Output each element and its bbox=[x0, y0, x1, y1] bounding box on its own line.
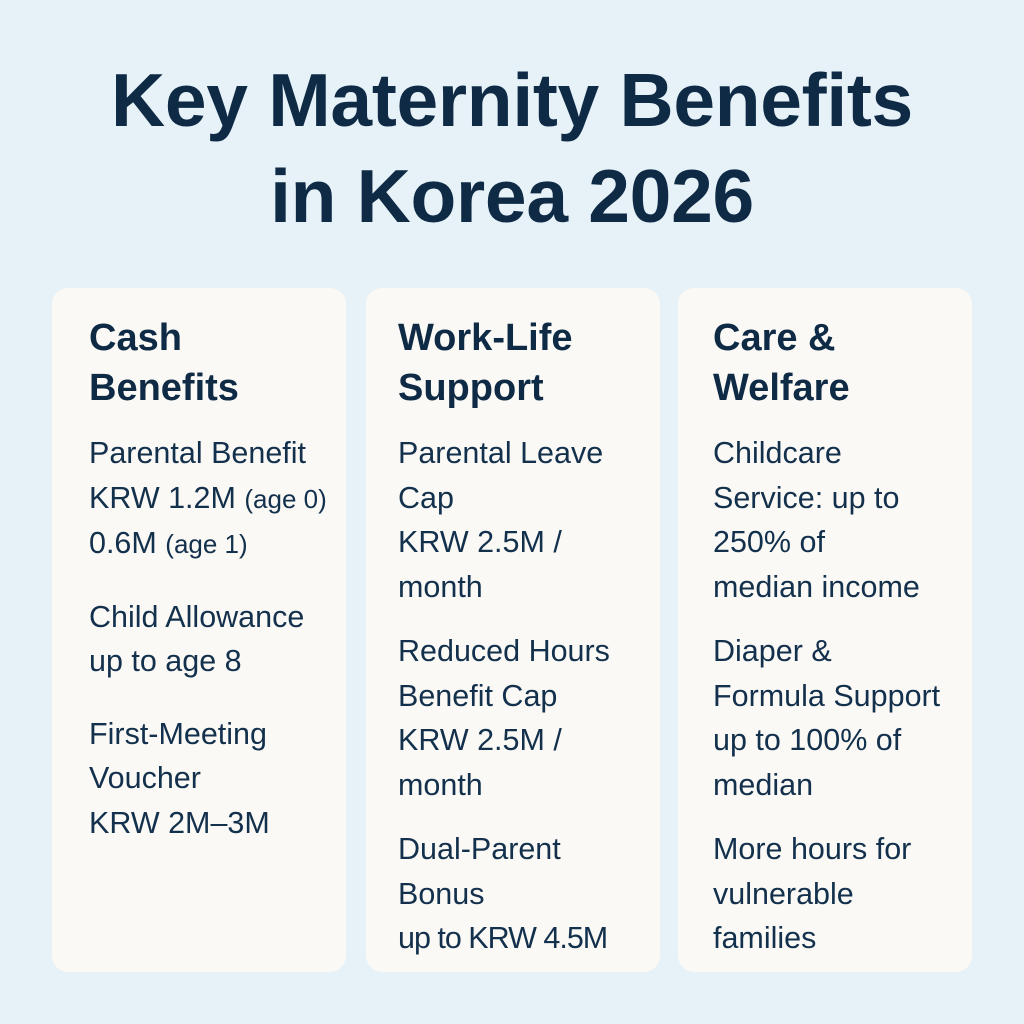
text: work-life items: month bbox=[398, 768, 483, 802]
heading: care & welfare bbox=[713, 317, 850, 409]
text: care items: More hours for bbox=[713, 832, 911, 866]
text: work-life items: Dual-Parent bbox=[398, 832, 561, 866]
text: care items: families bbox=[713, 921, 816, 955]
text: care items: Service: up to bbox=[713, 480, 900, 514]
text: care items: Formula Support bbox=[713, 678, 940, 712]
text: care items: Childcare bbox=[713, 436, 842, 470]
heading: work-life support: Work-Life bbox=[398, 317, 573, 359]
text: care items: vulnerable bbox=[713, 876, 854, 910]
text: cash benefits items: 0.6M (age 1) bbox=[89, 526, 248, 560]
text: work-life items: Benefit Cap bbox=[398, 678, 557, 712]
text: care items: median bbox=[713, 768, 813, 802]
title: in Korea 2026 bbox=[270, 154, 754, 238]
text: work-life items: KRW 2.5M / bbox=[398, 525, 562, 559]
text: cash benefits items: Child Allowance bbox=[89, 600, 304, 634]
text: work-life items: Cap bbox=[398, 480, 454, 514]
text: cash benefits items: KRW 1.2M (age 0) bbox=[89, 480, 327, 514]
panel: work-life support bbox=[366, 288, 660, 972]
text: cash benefits items: up to age 8 bbox=[89, 644, 242, 678]
heading: cash benefits: Benefits bbox=[89, 367, 239, 409]
text: care items: 250% of bbox=[713, 525, 825, 559]
text: work-life items bbox=[398, 436, 610, 955]
panel: cash benefits bbox=[52, 288, 346, 972]
text: care items: Diaper & bbox=[713, 634, 832, 668]
title bbox=[111, 58, 913, 238]
text: work-life items: up to KRW 4.5M bbox=[398, 921, 607, 955]
text: cash benefits items: Voucher bbox=[89, 761, 201, 795]
heading: care & welfare: Care & bbox=[713, 317, 836, 359]
heading: cash benefits bbox=[89, 317, 239, 409]
heading: cash benefits: Cash bbox=[89, 317, 182, 359]
text: cash benefits items: First-Meeting bbox=[89, 716, 267, 750]
text: cash benefits items: Parental Benefit bbox=[89, 436, 306, 470]
text: work-life items: KRW 2.5M / bbox=[398, 723, 562, 757]
heading: work-life support: Support bbox=[398, 367, 544, 409]
text: cash benefits items bbox=[89, 436, 327, 840]
heading: care & welfare: Welfare bbox=[713, 367, 850, 409]
text: work-life items: Bonus bbox=[398, 876, 484, 910]
text: care items: median income bbox=[713, 570, 920, 604]
text: care items: up to 100% of bbox=[713, 723, 901, 757]
text: work-life items: month bbox=[398, 570, 483, 604]
text: work-life items: Reduced Hours bbox=[398, 634, 610, 668]
panel: care & welfare bbox=[678, 288, 972, 972]
title: Key Maternity Benefits bbox=[111, 58, 913, 142]
text: work-life items: Parental Leave bbox=[398, 436, 603, 470]
text: cash benefits items: KRW 2M–3M bbox=[89, 806, 270, 840]
text: care items bbox=[713, 436, 940, 955]
heading: work-life support bbox=[398, 317, 573, 409]
